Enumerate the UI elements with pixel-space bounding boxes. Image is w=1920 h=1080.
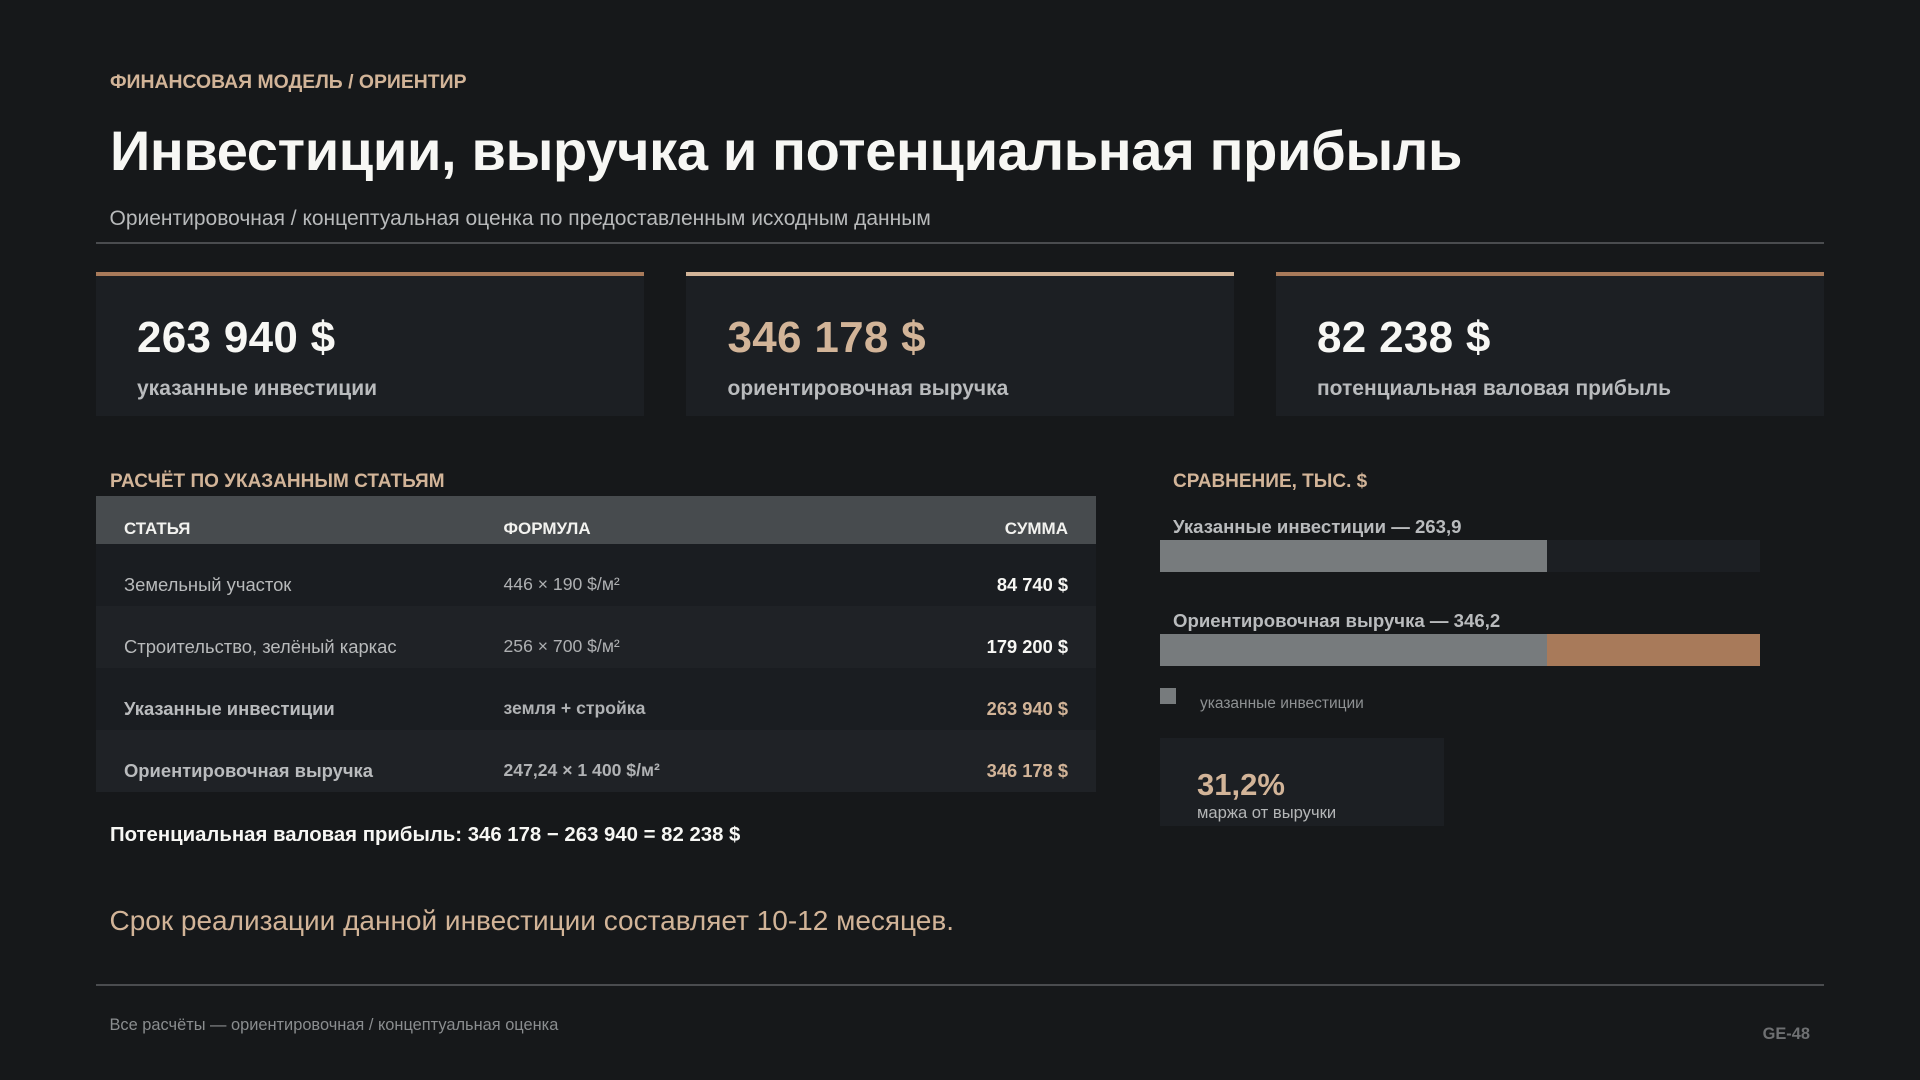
eyebrow label: ФИНАНСОВАЯ МОДЕЛЬ / ОРИЕНТИР [110,71,467,93]
row: land: Земельный участок [124,574,291,595]
section heading: comparison: СРАВНЕНИЕ, ТЫС. $ [1173,471,1367,492]
row: estimated revenue: Ориентировочная выручка [124,760,373,781]
page code: GE-48 [1763,1025,1810,1043]
row: stated investments: Указанные инвестиции [124,698,335,719]
table header: ФОРМУЛА [504,519,591,538]
footer note: Все расчёты — ориентировочная / концептуальная оценка [110,1016,558,1034]
row: construction [96,606,1096,668]
row: land [96,544,1096,606]
bar: revenue [1160,634,1760,666]
gross profit formula: Потенциальная валовая прибыль: 346 178 − 263 940 = 82 238 $ [110,824,740,846]
KPI card: revenue [686,272,1234,416]
row: stated investments: 263 940 $ [987,698,1068,719]
KPI label: profit: потенциальная валовая прибыль [1317,377,1671,400]
row: estimated revenue: 346 178 $ [987,760,1068,781]
row: stated investments [96,668,1096,730]
table header [96,496,1096,544]
bar label: investments: Указанные инвестиции — 263,9 [1173,516,1461,537]
margin card [1160,738,1444,826]
KPI card: profit [1276,272,1824,416]
subtitle: Ориентировочная / концептуальная оценка по предоставленным исходным данным [110,207,931,230]
row: construction: Строительство, зелёный каркас [124,636,397,657]
KPI value: profit: 82 238 $ [1317,312,1491,362]
row: stated investments: земля + стройка [504,698,645,718]
row: land: 84 740 $ [997,574,1068,595]
title: Инвестиции, выручка и потенциальная прибыль [110,119,1462,182]
margin caption: маржа от выручки [1197,803,1336,822]
timeline statement: Срок реализации данной инвестиции составляет 10-12 месяцев. [110,905,954,936]
legend [1160,688,1364,712]
KPI label: investments: указанные инвестиции [137,377,377,400]
KPI value: investments: 263 940 $ [137,312,335,362]
row: construction: 179 200 $ [987,636,1068,657]
bar: investments [1160,540,1760,572]
KPI card: investments [96,272,644,416]
margin value: 31,2% [1197,767,1285,802]
row: estimated revenue [96,730,1096,792]
calculation table [96,496,1096,792]
row: construction: 256 × 700 $/м² [504,636,620,656]
bar label: revenue: Ориентировочная выручка — 346,2 [1173,610,1500,631]
row: estimated revenue: 247,24 × 1 400 $/м² [504,760,660,780]
legend: указанные инвестиции [1200,695,1364,712]
table header: СТАТЬЯ [124,519,190,538]
row: land: 446 × 190 $/м² [504,574,620,594]
table header: СУММА [1005,519,1068,538]
KPI label: revenue: ориентировочная выручка [728,377,1008,400]
section heading: calculation: РАСЧЁТ ПО УКАЗАННЫМ СТАТЬЯМ [110,471,445,492]
KPI value: revenue: 346 178 $ [728,312,926,362]
